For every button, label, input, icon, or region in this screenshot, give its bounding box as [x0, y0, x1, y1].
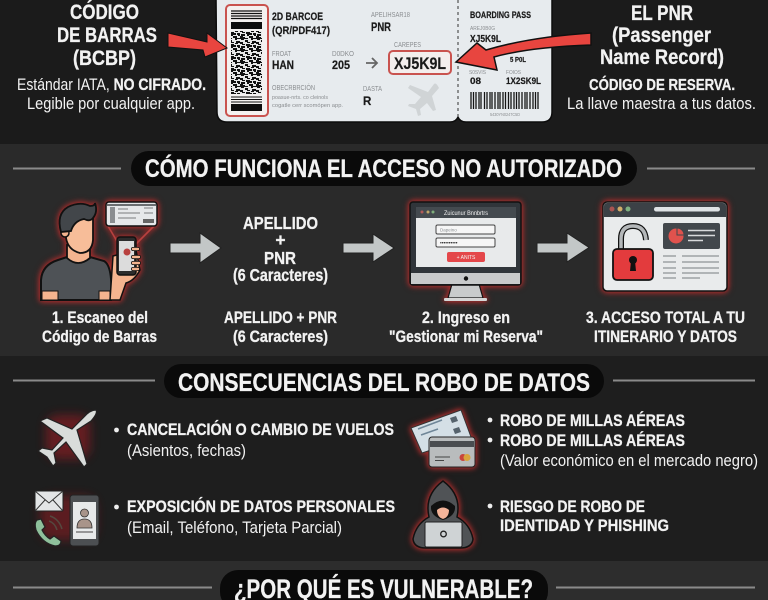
ticket stub fields — [469, 10, 541, 117]
panel: how it works background — [0, 144, 768, 356]
ticket left fields — [272, 11, 354, 109]
ticket stub fields: XJ5K9L — [470, 34, 501, 45]
arrow: PNR pointer — [456, 33, 591, 70]
icon: tickets and credit card — [411, 410, 475, 467]
neck — [67, 244, 90, 263]
heading: consequences — [13, 364, 755, 398]
caption: step 1 — [42, 308, 157, 346]
text block: barcode heading: DE BARRAS — [57, 23, 157, 47]
arrow: step 1 to step 2 — [170, 233, 221, 263]
ticket stub fields: 5430YN0247C5D — [490, 112, 521, 117]
ticket left fields: OBECRBRCIÓN — [272, 83, 315, 92]
caption: step 3: ITINERARIO Y DATOS — [594, 327, 737, 346]
ticket stub fields: AREJ0B0G — [470, 26, 495, 32]
heading: how unauthorized access works — [13, 151, 755, 186]
text block: barcode heading: (BCBP) — [73, 46, 136, 70]
icon: monitor login: Zuicunur Bnnbrtrs — [444, 211, 488, 217]
phone handset — [35, 519, 61, 546]
ticket left fields: 2D BARCOE — [272, 11, 323, 23]
forearm and hand — [110, 250, 140, 300]
ticket middle fields: CAREPES — [394, 42, 421, 49]
icon: person scanning ticket — [41, 202, 157, 300]
text block: PNR description: CÓDIGO DE RESERVA. — [589, 75, 735, 94]
arrow: barcode pointer — [168, 33, 227, 57]
ticket middle fields: R — [363, 96, 372, 108]
heading: why vulnerable — [13, 570, 755, 600]
text block: identity theft: RIESGO DE ROBO DE — [500, 497, 645, 516]
phone — [117, 237, 136, 275]
heading: how unauthorized access works: CÓMO FUNCIONA EL ACCESO NO AUTORIZADO — [145, 153, 622, 183]
icon: contact data — [35, 491, 99, 546]
panel: consequences background — [0, 356, 768, 561]
open padlock — [613, 226, 653, 280]
text block: barcode description: Estándar IATA, NO CIFRADO. — [17, 76, 206, 94]
ticket left fields: (QR/PDF417) — [272, 25, 330, 37]
caption: step 2: "Gestionar mi Reserva" — [389, 327, 543, 346]
icon: hooded hacker — [413, 481, 473, 548]
caption: formula — [224, 308, 337, 346]
text block: barcode heading — [57, 0, 157, 70]
ticket middle fields: APELIHSAR18 — [371, 12, 410, 19]
contact phone — [70, 495, 99, 546]
ticket left fields: poasue-nrts. co cleinols — [272, 95, 329, 101]
text block: personal data exposure — [114, 497, 395, 537]
ticket left fields: FROAT — [272, 51, 292, 58]
barcode BCBP — [226, 5, 268, 116]
ticket stub fields: S0SVIS — [469, 70, 486, 76]
text block: PNR heading — [600, 1, 724, 69]
ticket middle fields: PNR — [371, 22, 392, 34]
text block: surname plus PNR formula: (6 Caracteres) — [233, 265, 328, 285]
icon: monitor login: •••••••••• — [440, 240, 458, 246]
heading: consequences: CONSECUENCIAS DEL ROBO DE DATOS — [178, 369, 590, 397]
ticket stub fields: 08 — [470, 76, 481, 86]
text block: PNR heading: Name Record) — [600, 45, 724, 69]
caption: step 1: 1. Escaneo del — [52, 308, 148, 327]
arrow: step 2 to step 3 — [343, 234, 394, 262]
text block: miles theft: ROBO DE MILLAS AÉREAS — [500, 411, 685, 430]
text block: flight cancellation — [114, 420, 394, 460]
caption: step 1: Código de Barras — [42, 327, 157, 346]
caption: formula: APELLIDO + PNR — [224, 308, 337, 327]
icon: ticket plane — [408, 84, 439, 116]
text block: miles theft — [488, 411, 758, 470]
envelope — [35, 491, 63, 511]
text block: identity theft — [488, 497, 669, 535]
text block: personal data exposure: EXPOSICIÓN DE DATOS PERSONALES — [127, 497, 395, 516]
ear — [61, 229, 69, 237]
text block: surname plus PNR formula — [233, 213, 328, 285]
text block: barcode heading: CÓDIGO — [70, 0, 139, 24]
text block: barcode description: Legible por cualquier app. — [27, 95, 195, 113]
panel: why vulnerable background — [0, 561, 768, 600]
arrow: step 3 to step 4 — [537, 233, 589, 262]
ticket left fields: 205 — [332, 60, 351, 72]
text block: miles theft: ROBO DE MILLAS AÉREAS — [500, 431, 685, 450]
icon: browser unlocked padlock — [603, 202, 727, 291]
icon: monitor login: + ANITS — [457, 255, 476, 261]
icon: monitor login: Dapeino — [440, 228, 457, 232]
head — [66, 214, 93, 253]
ticket middle fields — [363, 12, 421, 108]
ticket stub fields: 5 P0L — [510, 57, 527, 64]
text block: surname plus PNR formula: + — [275, 230, 286, 250]
ticket left fields: cogatle cerr scomópen app. — [272, 103, 343, 109]
text block: flight cancellation: (Asientos, fechas) — [127, 441, 246, 460]
caption: step 2: 2. Ingreso en — [422, 308, 510, 327]
PNR code highlighted: XJ5K9L — [394, 54, 446, 73]
text block: flight cancellation: CANCELACIÓN O CAMBIO DE VUELOS — [127, 420, 394, 439]
caption: step 2 — [389, 308, 543, 346]
ticket left fields: HAN — [272, 60, 294, 72]
icon: monitor login — [410, 202, 521, 301]
fingers — [133, 249, 139, 269]
hair — [60, 203, 96, 232]
text block: personal data exposure: (Email, Teléfono, Tarjeta Parcial) — [127, 518, 342, 537]
text block: surname plus PNR formula: APELLIDO — [243, 213, 318, 233]
text block: PNR description — [567, 75, 756, 113]
text block: PNR heading: EL PNR — [631, 1, 693, 25]
ticket stub fields: FOIOS — [506, 70, 521, 76]
text block: PNR heading: (Passenger — [612, 23, 712, 47]
ticket stub fields: 1X2SK9L — [506, 76, 541, 86]
text block: identity theft: IDENTIDAD Y PHISHING — [500, 516, 669, 535]
text block: barcode description — [17, 76, 206, 113]
text block: surname plus PNR formula: PNR — [264, 248, 296, 268]
scanned ticket — [106, 202, 157, 226]
caption: formula: (6 Caracteres) — [233, 327, 328, 346]
icon: airplane — [38, 410, 96, 467]
caption: step 3 — [586, 308, 745, 346]
ticket left fields: D0DKO — [332, 51, 354, 58]
boarding pass ticket — [216, 0, 552, 122]
torso — [41, 257, 111, 300]
ticket stub fields: BOARDING PASS — [470, 10, 531, 21]
ticket middle fields: DASTA — [363, 86, 382, 93]
panel: top background — [0, 0, 768, 144]
chart card — [663, 223, 720, 249]
